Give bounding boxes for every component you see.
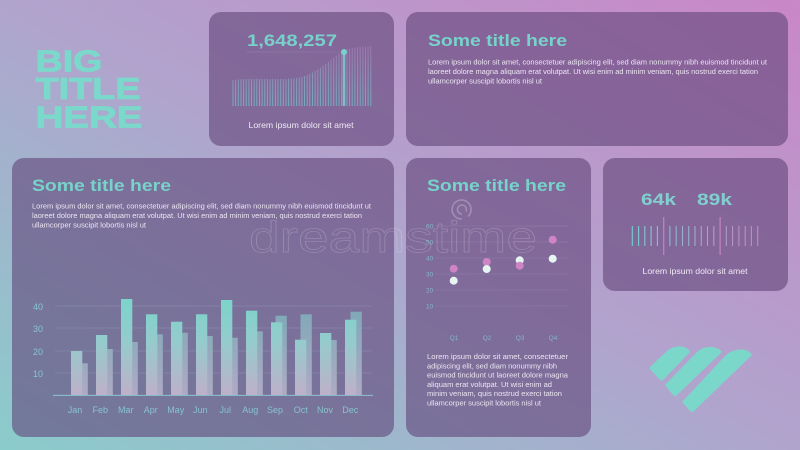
values <box>641 191 733 209</box>
body text: adipiscing elit, sed diam nonummy nibh <box>427 363 557 370</box>
dot chart: Q3 <box>516 335 525 342</box>
body text: ullamcorper suscipit lobortis nisl ut <box>32 222 146 230</box>
tall ticks <box>664 217 720 255</box>
bar chart: Dec <box>342 405 359 415</box>
dot chart: 20 <box>426 288 434 294</box>
bar chart: Jan <box>68 405 82 415</box>
bar chart: Jul <box>220 405 231 415</box>
body text: euismod tincidunt ut laoreet dolore magna <box>427 373 568 380</box>
bar chart: Nov <box>317 405 333 415</box>
tick scale <box>632 226 758 246</box>
dot chart: 30 <box>426 272 434 278</box>
heading: Some title here <box>428 32 567 50</box>
caption: Lorem ipsum dolor sit amet <box>642 266 748 276</box>
body text: aliquam erat volutpat. Ut wisi enim ad <box>427 382 552 389</box>
panel: two values with ticks <box>603 158 788 291</box>
caption: Lorem ipsum dolor sit amet <box>248 120 354 130</box>
dot chart: 10 <box>426 304 434 310</box>
body text: Lorem ipsum dolor sit amet, consectetuer <box>427 354 569 361</box>
values: 89k <box>697 191 733 209</box>
bar chart <box>33 299 373 415</box>
panel: bar chart <box>12 158 394 437</box>
body text: Lorem ipsum dolor sit amet, consectetuer adipiscing elit, sed diam nonummy nibh euismod tincidunt ut <box>32 204 371 210</box>
panel: dot chart <box>406 158 591 437</box>
body text <box>428 60 767 86</box>
body text: laoreet dolore magna aliquam erat volutpat. Ut wisi enim ad minim veniam, quis nostrud exerci tation <box>428 69 758 76</box>
body text <box>427 354 569 408</box>
bar chart: Oct <box>294 405 308 415</box>
body text: ullamcorper suscipit lobortis nisl ut <box>428 78 542 86</box>
body text: laoreet dolore magna aliquam erat volutpat. Ut wisi enim ad minim veniam, quis nostrud exerci tation <box>32 213 362 220</box>
watermark <box>249 200 537 262</box>
bar chart: Jun <box>193 405 208 415</box>
big title: TITLE <box>36 71 140 106</box>
dot chart: 40 <box>426 256 434 262</box>
body text <box>32 204 371 230</box>
values: 64k <box>641 191 677 209</box>
bar chart: Sep <box>267 405 283 415</box>
heading: Some title here <box>32 177 171 195</box>
dot chart <box>426 224 568 342</box>
body text: ullamcorper suscipit lobortis nisl ut <box>427 400 541 408</box>
big title: HERE <box>36 100 142 134</box>
bar chart: 40 <box>33 302 43 312</box>
dot chart: 50 <box>426 240 434 246</box>
bar chart: 30 <box>33 324 43 334</box>
bar chart: Feb <box>93 405 108 415</box>
bar chart: 10 <box>33 369 43 379</box>
panel: counter with area chart <box>209 12 394 146</box>
watermark: dreamstime <box>249 213 537 262</box>
dot chart: Q1 <box>450 335 459 342</box>
dot chart: 60 <box>426 224 434 230</box>
panel: top text <box>406 12 788 146</box>
bar chart: Mar <box>118 405 133 415</box>
bar chart: May <box>167 405 185 415</box>
dot chart: Q2 <box>483 335 492 342</box>
big title <box>36 44 142 134</box>
logo icon: striped heart <box>649 346 752 412</box>
body text: Lorem ipsum dolor sit amet, consectetuer adipiscing elit, sed diam nonummy nibh euismod tincidunt ut <box>428 60 767 66</box>
counter value: 1,648,257 <box>247 32 337 50</box>
bar chart: Aug <box>242 405 258 415</box>
dot chart: Q4 <box>549 335 558 342</box>
heading: Some title here <box>427 177 566 195</box>
bar chart: 20 <box>33 347 43 357</box>
big title: BIG <box>36 44 102 78</box>
line area chart <box>233 46 371 106</box>
body text: minim veniam, quis nostrud exerci tation <box>427 391 562 398</box>
bar chart: Apr <box>144 405 158 415</box>
